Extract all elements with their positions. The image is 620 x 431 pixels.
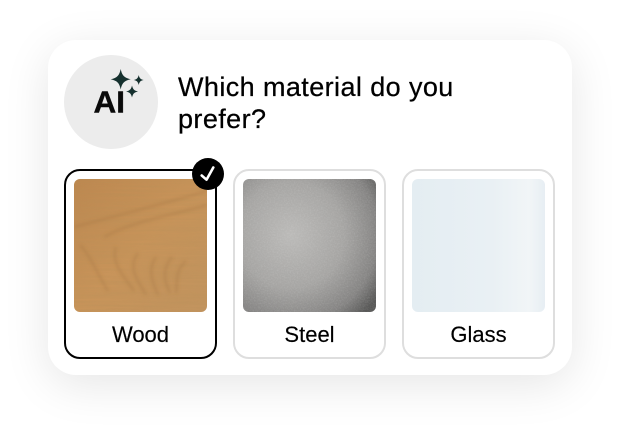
wood image [74, 179, 207, 312]
label: wood: Wood [112, 322, 169, 347]
label: glass: Glass [450, 322, 507, 347]
title: Which material do you [178, 72, 454, 102]
steel image [243, 179, 376, 312]
title: prefer? [178, 104, 266, 134]
label: steel: Steel [284, 322, 335, 347]
option: wood [64, 169, 217, 359]
title [178, 72, 454, 134]
glass image [412, 179, 545, 312]
icon: AI sparkle badge: AI [94, 84, 125, 120]
card panel [48, 40, 572, 375]
icon: AI sparkle badge [64, 55, 158, 149]
option: steel [233, 169, 386, 359]
icon: selected check badge [192, 158, 224, 190]
